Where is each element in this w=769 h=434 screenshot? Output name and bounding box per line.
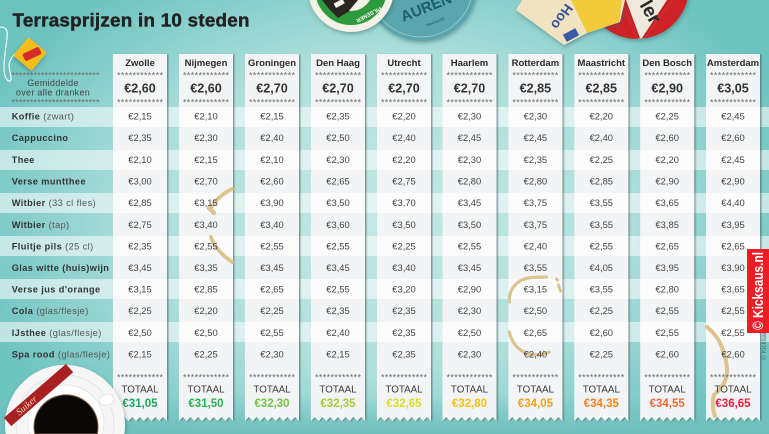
column: Amsterdam: €2,55 — [721, 327, 745, 338]
column: Zwolle: ************ — [117, 98, 163, 108]
column: Haarlem: €2,30 — [458, 110, 481, 122]
column: Groningen: €3,45 — [260, 262, 284, 273]
column: Rotterdam: €2,65 — [524, 327, 547, 338]
column: Nijmegen: €2,25 — [194, 348, 218, 360]
column: Haarlem: €2,30 — [458, 305, 481, 316]
column: Den Haag: ************ — [315, 70, 361, 80]
column: Zwolle: €2,35 — [128, 240, 152, 252]
column: Zwolle: €2,15 — [128, 110, 152, 122]
column: Maastricht: TOTAAL — [583, 384, 620, 396]
column: Den Bosch: €2,90 — [651, 82, 683, 96]
column: Utrecht: €3,50 — [392, 219, 416, 230]
column: Den Haag: €2,15 — [326, 348, 350, 360]
column: Maastricht — [578, 58, 626, 410]
column: Haarlem: ************ — [446, 98, 493, 108]
column: Haarlem: €2,30 — [458, 348, 481, 360]
column: Amsterdam — [707, 58, 759, 410]
column: Zwolle: ************ — [117, 372, 163, 382]
badge: Kicksaus.nl: © Kicksaus.nl — [751, 252, 767, 330]
column: Zwolle: €2,85 — [128, 197, 152, 208]
column: Groningen: €2,55 — [260, 327, 284, 338]
column: Utrecht: €2,25 — [392, 240, 416, 252]
table row bands — [0, 107, 769, 342]
row highlights on paper — [113, 107, 760, 342]
column: Groningen: €2,10 — [260, 154, 284, 165]
column: Groningen: €2,30 — [260, 348, 284, 360]
column: Den Bosch: Den Bosch — [642, 58, 692, 69]
column: Rotterdam: €3,15 — [524, 284, 547, 294]
row labels: Cola (glas/flesje) — [12, 306, 89, 316]
column: Amsterdam: €3,95 — [721, 219, 745, 230]
column: Den Haag: €2,70 — [322, 82, 354, 96]
column: Maastricht: €2,55 — [590, 240, 613, 252]
column: Den Haag: €2,30 — [326, 154, 350, 165]
column: Amsterdam: €2,55 — [721, 305, 745, 316]
column: Nijmegen: €2,70 — [194, 176, 218, 186]
column: Maastricht: €2,25 — [590, 154, 613, 165]
column: Zwolle: €2,15 — [128, 348, 152, 360]
column: Nijmegen: ************ — [183, 372, 229, 382]
column: Haarlem: TOTAAL — [451, 384, 489, 396]
column: Haarlem: €3,50 — [458, 219, 481, 230]
credit: small vertical: © Kicksaus — [760, 327, 768, 360]
column: Haarlem — [446, 58, 493, 410]
panel: average label: Gemiddelde — [27, 78, 79, 88]
row labels: Verse muntthee — [12, 176, 86, 186]
column: Haarlem: ************ — [446, 70, 493, 80]
row labels: IJsthee (glas/flesje) — [12, 328, 102, 338]
column: Nijmegen: €2,10 — [194, 110, 218, 122]
column: Den Bosch: €2,60 — [655, 348, 679, 360]
column: Groningen: €2,40 — [260, 132, 284, 143]
column: Den Haag: €32,35 — [320, 398, 356, 410]
coaster: green pilsener: PILSENER — [355, 5, 382, 23]
column: Zwolle: Zwolle — [125, 58, 155, 69]
column: Utrecht: Utrecht — [387, 58, 421, 69]
card: sugar packet: Hoo — [548, 1, 576, 33]
column: Haarlem: €2,90 — [458, 284, 481, 294]
column: Rotterdam — [512, 58, 559, 410]
column: Den Haag: TOTAAL — [319, 384, 357, 396]
column: Amsterdam: ************ — [710, 98, 756, 108]
row labels: Spa rood (glas/flesje) — [12, 350, 110, 360]
column: Maastricht: ************ — [578, 98, 625, 108]
column: Groningen: €3,90 — [260, 197, 284, 208]
column: Den Bosch: €2,90 — [655, 176, 679, 186]
column: Utrecht: ************ — [381, 70, 427, 80]
column: Den Haag: €2,65 — [326, 176, 350, 186]
column: Den Haag: €3,50 — [326, 197, 350, 208]
column: Nijmegen: €3,35 — [194, 262, 218, 273]
column: Utrecht: ************ — [381, 98, 427, 108]
row labels: Cappuccino — [12, 133, 68, 143]
column: Haarlem: €3,45 — [458, 197, 481, 208]
column: Zwolle: €2,50 — [128, 327, 152, 338]
column: Amsterdam: €2,60 — [721, 132, 745, 143]
column: Zwolle: €2,60 — [124, 82, 156, 96]
column: Zwolle: €3,45 — [128, 262, 152, 273]
column: Den Bosch: €3,65 — [655, 197, 679, 208]
row labels: Koffie (zwart) — [12, 112, 74, 122]
column: Den Bosch: ************ — [644, 70, 691, 80]
panel: average label: over alle dranken — [16, 87, 90, 97]
column: Maastricht: €2,20 — [590, 110, 613, 122]
column: Zwolle: €2,10 — [128, 154, 152, 165]
column: Haarlem: €32,80 — [452, 398, 487, 410]
column: Haarlem: €2,30 — [458, 154, 481, 165]
column: Utrecht: €2,20 — [392, 154, 416, 165]
column: Utrecht: €2,75 — [392, 176, 416, 186]
column: Den Haag: Den Haag — [316, 58, 360, 69]
column: Haarlem: €2,50 — [458, 327, 481, 338]
row labels: Witbier (tap) — [12, 220, 70, 230]
column: Utrecht: €3,20 — [392, 284, 416, 294]
column: Amsterdam: ************ — [710, 372, 756, 382]
column: Den Haag: €2,35 — [326, 110, 350, 122]
column: Nijmegen: €3,40 — [194, 219, 218, 230]
column: Nijmegen: €3,15 — [194, 197, 218, 208]
column: Groningen: Groningen — [248, 58, 296, 69]
column: Utrecht: €3,40 — [392, 262, 416, 273]
column: Amsterdam: €2,90 — [721, 176, 745, 186]
column: Den Haag: €2,55 — [326, 240, 350, 252]
column: Nijmegen: €2,60 — [190, 82, 222, 96]
column: Den Bosch: €2,25 — [655, 110, 679, 122]
column: Amsterdam: €3,05 — [717, 82, 749, 96]
row labels: Glas witte (huis)wijn — [12, 263, 109, 273]
column: Zwolle: TOTAAL — [121, 384, 159, 396]
panel: average label: ************************ — [12, 70, 100, 80]
column: Zwolle: €2,25 — [128, 305, 152, 316]
column: Maastricht: €3,55 — [590, 284, 613, 294]
column: Groningen: €2,70 — [256, 82, 288, 96]
column: Nijmegen: €2,30 — [194, 132, 218, 143]
column: Maastricht: €2,60 — [590, 327, 613, 338]
column: Rotterdam: €3,75 — [524, 197, 547, 208]
column: Utrecht — [381, 58, 427, 410]
column: Utrecht: €2,70 — [388, 82, 420, 96]
coaster: red beer — [585, 0, 689, 39]
column: Rotterdam: €3,75 — [524, 219, 547, 230]
column: Amsterdam: €2,45 — [721, 154, 745, 165]
column: Maastricht: €4,05 — [590, 262, 613, 273]
column: Zwolle: €2,35 — [128, 132, 152, 143]
column: Den Bosch — [642, 58, 692, 410]
column: Rotterdam: €2,85 — [520, 82, 551, 96]
column: Amsterdam: ************ — [710, 70, 756, 80]
sugar stick: Suiker — [15, 394, 40, 418]
column: Amsterdam: €3,65 — [721, 284, 745, 294]
column: Den Haag: ************ — [315, 372, 361, 382]
column: Groningen: €3,40 — [260, 219, 284, 230]
column: Den Haag: €2,55 — [326, 284, 350, 294]
column: Nijmegen: €2,85 — [194, 284, 218, 294]
column: Nijmegen — [183, 58, 229, 410]
column: Utrecht: €2,35 — [392, 327, 416, 338]
column: Maastricht: ************ — [578, 70, 625, 80]
column: Den Bosch: €2,65 — [655, 240, 679, 252]
column: Maastricht: €2,40 — [590, 132, 613, 143]
column: Rotterdam: €2,45 — [524, 132, 547, 143]
column: Maastricht: €3,55 — [590, 219, 613, 230]
column: Utrecht: €2,40 — [392, 132, 416, 143]
column: Amsterdam: €2,65 — [721, 240, 745, 252]
column: Maastricht: €2,25 — [590, 305, 613, 316]
icon: coffee cup on saucer — [4, 364, 125, 434]
row labels: Fluitje pils (25 cl) — [12, 242, 94, 252]
column: Amsterdam: €3,90 — [721, 262, 745, 273]
column: Amsterdam: TOTAAL — [714, 384, 752, 396]
column: Amsterdam: €4,40 — [721, 197, 745, 208]
column: Groningen: ************ — [249, 372, 295, 382]
column: Rotterdam: €2,40 — [524, 240, 547, 252]
column: Den Bosch: €2,60 — [655, 132, 679, 143]
column: Rotterdam: €2,40 — [524, 348, 547, 360]
column: Amsterdam: Amsterdam — [707, 58, 759, 69]
column: Utrecht: €2,20 — [392, 110, 416, 122]
column: Rotterdam: €2,35 — [524, 154, 547, 165]
column: Haarlem: Haarlem — [451, 58, 488, 69]
badge: Kicksaus.nl — [747, 249, 769, 333]
panel: average label — [12, 70, 100, 108]
column: Amsterdam: €2,45 — [721, 110, 745, 122]
column: Haarlem: ************ — [446, 372, 493, 382]
column: Groningen: €2,60 — [260, 176, 284, 186]
column: Den Bosch: €2,20 — [655, 154, 679, 165]
column: Maastricht: €2,85 — [586, 82, 617, 96]
column: Haarlem: €2,55 — [458, 240, 481, 252]
column: Utrecht: €2,35 — [392, 305, 416, 316]
column: Groningen: ************ — [249, 70, 295, 80]
column: Den Haag: €2,40 — [326, 327, 350, 338]
column: Amsterdam: €2,60 — [721, 348, 745, 360]
coffee stains — [209, 189, 727, 416]
column: Maastricht: €2,85 — [590, 176, 613, 186]
column: Zwolle: ************ — [117, 70, 163, 80]
column: Den Bosch: ************ — [644, 372, 691, 382]
column: Rotterdam: TOTAAL — [517, 384, 555, 396]
coaster: green pilsener — [308, 0, 394, 32]
column: Groningen: €2,55 — [260, 240, 284, 252]
row labels: Witbier (33 cl fles) — [12, 198, 96, 208]
column: Rotterdam: €2,80 — [524, 176, 547, 186]
column: Haarlem: €2,70 — [454, 82, 485, 96]
column: Groningen: ************ — [249, 98, 295, 108]
row labels: Thee — [12, 155, 35, 165]
column: Utrecht: TOTAAL — [385, 384, 423, 396]
column: Haarlem: €2,80 — [458, 176, 481, 186]
column: Zwolle: €31,05 — [122, 398, 158, 410]
coaster: blue Auren: Meesterlijk — [426, 16, 445, 28]
column: Rotterdam: ************ — [512, 70, 559, 80]
column: Groningen — [248, 58, 296, 410]
column: Den Haag: ************ — [315, 98, 361, 108]
column: Utrecht: €2,35 — [392, 348, 416, 360]
column: Nijmegen: €31,50 — [188, 398, 224, 410]
column: Maastricht: ************ — [578, 372, 625, 382]
column: Maastricht: Maastricht — [578, 58, 626, 69]
column: Haarlem: €2,45 — [458, 132, 481, 143]
column: Groningen: TOTAAL — [253, 384, 291, 396]
column: Utrecht: €3,70 — [392, 197, 416, 208]
paper receipts — [113, 54, 760, 421]
column: Den Bosch: €3,85 — [655, 219, 679, 230]
column: Maastricht: €2,25 — [590, 348, 613, 360]
card: sugar packet — [516, 0, 625, 45]
column: Den Bosch: €3,95 — [655, 262, 679, 273]
title: Terrasprijzen in 10 steden — [12, 10, 250, 31]
column: Maastricht: €34,35 — [584, 398, 619, 410]
column: Rotterdam: ************ — [512, 98, 559, 108]
column: Den Haag: €3,60 — [326, 219, 350, 230]
column: Utrecht: ************ — [381, 372, 427, 382]
column: Amsterdam: €36,65 — [715, 398, 751, 410]
row labels — [12, 112, 110, 360]
column: Zwolle — [117, 58, 163, 410]
column: Nijmegen: €2,50 — [194, 327, 218, 338]
panel: average label: ************************ — [12, 98, 100, 108]
column: Nijmegen: €2,15 — [194, 154, 218, 165]
column: Nijmegen: €2,55 — [194, 240, 218, 252]
column: Nijmegen: Nijmegen — [185, 58, 228, 69]
column: Rotterdam: ************ — [512, 372, 559, 382]
cup handle — [98, 393, 115, 406]
column: Den Bosch: TOTAAL — [649, 384, 686, 396]
column: Den Bosch: ************ — [644, 98, 691, 108]
coaster: blue Auren — [365, 0, 477, 41]
column: Rotterdam: €2,30 — [524, 110, 547, 122]
column: Den Bosch: €2,55 — [655, 327, 679, 338]
column: Zwolle: €2,75 — [128, 219, 152, 230]
column: Rotterdam: Rotterdam — [512, 58, 559, 69]
column: Nijmegen: ************ — [183, 98, 229, 108]
column: Nijmegen: €2,20 — [194, 305, 218, 316]
column: Nijmegen: TOTAAL — [187, 384, 225, 396]
column: Rotterdam: €3,55 — [524, 262, 547, 273]
column: Rotterdam: €34,05 — [518, 398, 554, 410]
column: Groningen: €2,25 — [260, 305, 284, 316]
column: Haarlem: €3,45 — [458, 262, 481, 273]
column: Den Haag: €3,45 — [326, 262, 350, 273]
icon: tea bag with string — [0, 27, 47, 81]
column: Nijmegen: ************ — [183, 70, 229, 80]
column: Groningen: €32,30 — [254, 398, 290, 410]
column: Groningen: €2,65 — [260, 284, 284, 294]
column: Den Haag — [315, 58, 361, 410]
column: Den Haag: €2,35 — [326, 305, 350, 316]
column: Utrecht: €32,65 — [386, 398, 422, 410]
column: Rotterdam: €2,50 — [524, 305, 547, 316]
column: Den Bosch: €2,55 — [655, 305, 679, 316]
column: Groningen: €2,15 — [260, 110, 284, 122]
column: Maastricht: €3,55 — [590, 197, 613, 208]
column: Den Haag: €2,50 — [326, 132, 350, 143]
column: Zwolle: €3,15 — [128, 284, 152, 294]
column: Zwolle: €3,00 — [128, 176, 152, 186]
row labels: Verse jus d'orange — [12, 284, 101, 294]
column: Den Bosch: €34,55 — [650, 398, 685, 410]
column: Den Bosch: €2,80 — [655, 284, 679, 294]
